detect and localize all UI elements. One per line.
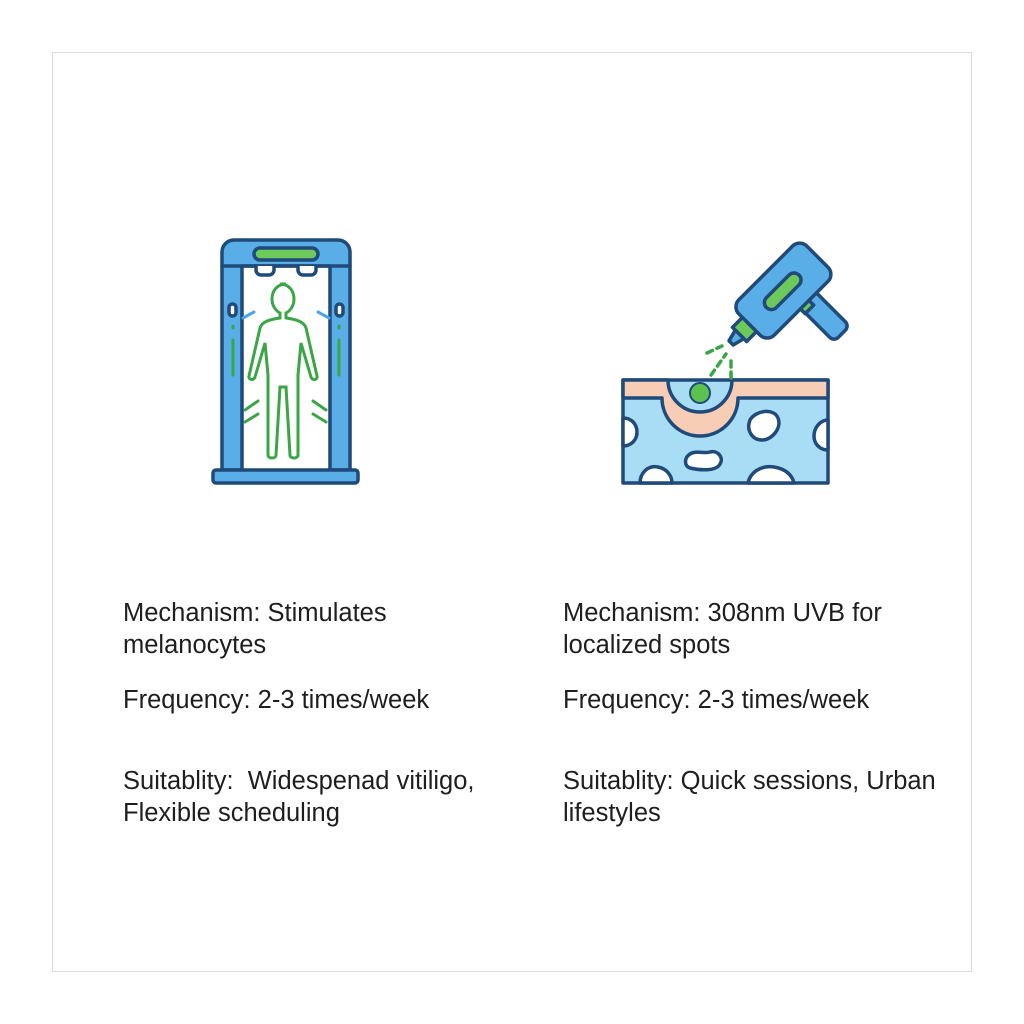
text block: left: Suitablity: Widespenad vitiligo,	[123, 767, 475, 795]
text block: left: Mechanism: Stimulates	[123, 599, 387, 627]
text block: right: Frequency: 2-3 times/week	[563, 686, 869, 714]
text block: right: lifestyles	[563, 799, 661, 827]
text block: left: Frequency: 2-3 times/week	[123, 686, 429, 714]
text block: right: localized spots	[563, 631, 730, 659]
text block: left: melanocytes	[123, 631, 266, 659]
text block: right: Mechanism: 308nm UVB for	[563, 599, 882, 627]
text block: right: Suitablity: Quick sessions, Urban	[563, 767, 936, 795]
text block: left	[123, 599, 475, 827]
text block: left: Flexible scheduling	[123, 799, 340, 827]
text block: right	[563, 599, 936, 827]
